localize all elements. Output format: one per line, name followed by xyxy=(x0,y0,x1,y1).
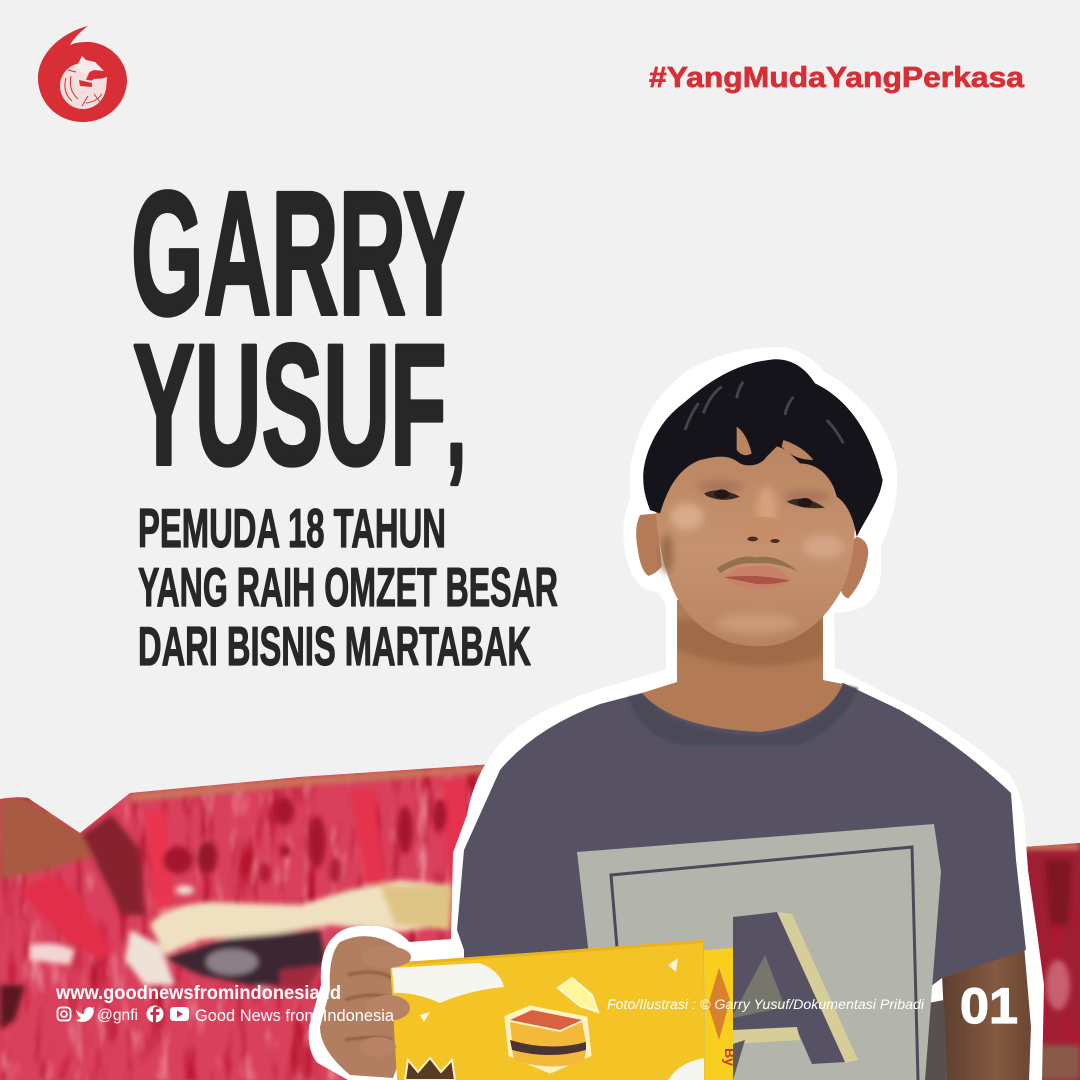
t-shirt collar shading xyxy=(628,684,858,745)
person: head xyxy=(636,359,883,646)
box: front xyxy=(390,940,705,1080)
person: background gap beside arm xyxy=(918,1000,947,1080)
title xyxy=(131,156,466,501)
box: side ornament xyxy=(708,968,730,1040)
box: hand icon xyxy=(558,978,598,1012)
logo: red teardrop six xyxy=(38,26,127,122)
martabak photo: right xyxy=(1026,843,1080,1080)
print: grey panel xyxy=(577,824,941,1080)
face shading xyxy=(661,480,843,633)
title line 1: GARRY xyxy=(131,156,465,352)
print: letter A xyxy=(733,912,858,1080)
box: crown icons xyxy=(405,1058,455,1080)
social row xyxy=(58,1006,395,1025)
print: thin frame line xyxy=(611,847,918,1080)
hair xyxy=(643,359,883,537)
icon: facebook xyxy=(146,1006,164,1023)
website url: www.goodnewsfromindonesia.id xyxy=(55,983,341,1004)
hand: fingers over box xyxy=(360,946,411,1057)
title line 2: YUSUF, xyxy=(133,309,466,501)
ear: left xyxy=(636,513,662,576)
forelock gap xyxy=(737,427,752,455)
t-shirt print xyxy=(577,824,941,1080)
moustache xyxy=(717,556,798,573)
icon: instagram xyxy=(58,1008,70,1020)
box: top rim xyxy=(404,940,704,965)
icon: youtube xyxy=(170,1007,189,1021)
eye: right xyxy=(787,498,825,508)
box: cloud right xyxy=(668,1058,704,1080)
ear: right xyxy=(840,537,868,598)
hand finger lines xyxy=(345,972,395,1040)
subtitle line 3: DARI BISNIS MARTABAK xyxy=(138,615,531,677)
nose xyxy=(739,517,787,543)
mouth xyxy=(723,566,791,590)
box: side panel xyxy=(704,948,733,1080)
page number: 01 xyxy=(960,978,1018,1034)
product box xyxy=(388,938,738,1080)
box: cake icon xyxy=(506,1007,590,1072)
subtitle line 1: PEMUDA 18 TAHUN xyxy=(138,497,446,559)
face xyxy=(655,433,855,646)
box: small stars xyxy=(420,958,678,1022)
icon: twitter xyxy=(76,1007,94,1022)
person: hand xyxy=(320,936,412,1078)
fringe gap right xyxy=(782,440,813,460)
eye: left xyxy=(704,489,740,500)
hashtag: #YangMudaYangPerkasa xyxy=(649,62,1025,94)
social handle: @gnfi xyxy=(97,1007,138,1024)
box: side lettering: By xyxy=(722,1048,738,1066)
person: neck xyxy=(642,600,843,732)
martabak photo: left xyxy=(0,760,500,1080)
person: arm xyxy=(942,945,1031,1080)
subtitle line 2: YANG RAIH OMZET BESAR xyxy=(138,556,558,618)
logo xyxy=(38,26,127,122)
social name: Good News from Indonesia xyxy=(195,1006,395,1025)
neck shadow xyxy=(677,620,823,666)
logo: white eagle G xyxy=(60,56,112,109)
photo credit: Foto/Ilustrasi : © Garry Yusuf/Dokumentasi Pribadi xyxy=(607,997,925,1012)
person: white sticker outline xyxy=(310,348,1043,1080)
hair highlights xyxy=(685,382,843,443)
subtitle xyxy=(138,497,558,677)
box: cloud left xyxy=(392,963,504,1003)
person: t-shirt xyxy=(457,683,1026,1080)
